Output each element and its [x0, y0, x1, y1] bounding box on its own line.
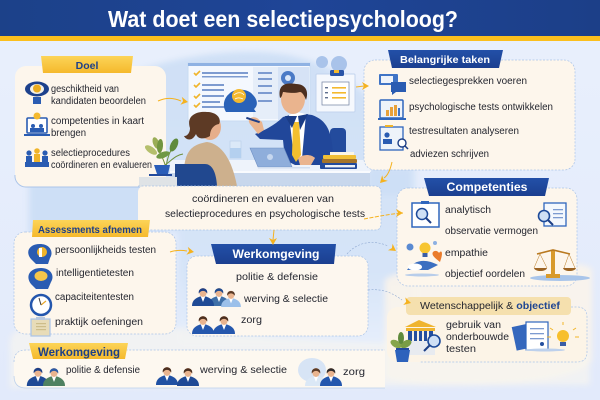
panel: Doel	[15, 56, 166, 187]
badge: Competenties	[424, 178, 549, 196]
text: werving & selectie: werving & selectie	[199, 365, 287, 376]
text: selectieprocedures	[51, 148, 152, 171]
people: recruiters	[156, 367, 199, 386]
icon: clipboard magnifier	[412, 201, 439, 227]
icon: team	[25, 148, 49, 167]
icon: clipboard	[31, 317, 50, 336]
central illustration: interview scene	[170, 56, 372, 186]
text: intelligentietesten: intelligentietesten	[56, 268, 134, 279]
text: analytisch: analytisch	[445, 205, 491, 216]
badge: Assessments afnemen	[32, 220, 150, 237]
text: geschiktheid: kandidaten beoordelen	[51, 96, 146, 107]
decorative gears	[281, 56, 347, 85]
clipboard	[316, 70, 355, 112]
text: competenties: competenties in kaart	[51, 116, 144, 127]
text: selectieprocedures: coördineren en evalueren	[51, 160, 152, 171]
icon: chat	[379, 74, 406, 95]
icon: scales	[530, 250, 590, 281]
text: zorg: zorg	[343, 367, 365, 378]
badge: Belangrijke taken: Belangrijke taken	[400, 54, 490, 66]
text: adviezen schrijven: adviezen schrijven	[410, 149, 489, 160]
candidate	[175, 112, 237, 186]
icon: clock	[31, 295, 51, 315]
text: gebruik: onderbouwde	[446, 332, 509, 343]
text: geschiktheid	[51, 84, 146, 107]
text: competenties: brengen	[51, 128, 86, 139]
panel: Wetenschappelijk & objectief	[387, 297, 587, 362]
text: objectief oordelen: objectief oordelen	[445, 269, 525, 280]
icon: light bulb	[547, 322, 579, 346]
text: geschiktheid: geschiktheid van	[51, 84, 119, 95]
badge: Competenties: Competenties	[446, 182, 528, 194]
text: gebruik: gebruik van	[446, 320, 501, 331]
people: doctor and colleague	[298, 358, 342, 386]
text: gebruik: testen	[446, 344, 476, 355]
icon: potted plant	[389, 332, 413, 362]
people: police and recruiter	[192, 288, 241, 307]
text: politie & defensie: politie & defensie	[66, 365, 140, 376]
text: persoonlijkheids testen: persoonlijkheids testen	[55, 245, 156, 256]
glass	[230, 141, 241, 158]
psychologist	[246, 84, 333, 165]
badge: Werkomgeving center	[211, 244, 336, 264]
people: police and defence	[27, 368, 65, 386]
text: testresultaten analyseren: testresultaten analyseren	[409, 126, 519, 137]
desk	[170, 160, 372, 186]
badge: Werkomgeving bottom: Werkomgeving	[38, 347, 120, 359]
icon: presentation	[24, 112, 50, 136]
badge: Assessments afnemen: Assessments afnemen	[38, 225, 142, 236]
badge: Werkomgeving bottom	[29, 343, 128, 359]
arrow: coordineren to Werkomgeving	[269, 230, 277, 245]
panel: Werkomgeving bottom	[14, 343, 385, 388]
icon: empathy bulb and heart	[405, 241, 442, 276]
icon: personality head	[28, 244, 52, 264]
panel: coordineren: coördineren en evalueren van	[192, 193, 334, 205]
panel: Competenties	[397, 178, 590, 286]
text: empathie: empathie	[445, 248, 488, 259]
books	[320, 152, 357, 169]
badge: Doel: Doel	[76, 60, 98, 72]
text: zorg: zorg	[241, 315, 262, 326]
text: gebruik	[446, 320, 509, 355]
plant on desk	[139, 136, 183, 187]
text: psychologische tests ontwikkelen: psychologische tests ontwikkelen	[409, 102, 553, 113]
panel: Belangrijke taken	[364, 50, 575, 170]
text: capaciteitentesten: capaciteitentesten	[55, 292, 134, 303]
arrow: Werkomgeving to Wetenschappelijk	[368, 290, 412, 307]
presentation board	[188, 63, 310, 121]
title: Wat doet een selectiepsycholoog?	[108, 6, 458, 32]
text: selectieprocedures: selectieprocedures	[51, 148, 130, 159]
arrow: Werkomgeving to Competenties	[347, 242, 398, 254]
arrow: Doel to scene	[158, 97, 189, 106]
title banner	[0, 0, 600, 41]
icon: chart laptop	[378, 100, 406, 120]
panel: Werkomgeving center	[187, 244, 368, 336]
badge: Wetenschappelijk: Wetenschappelijk & objectief	[420, 300, 560, 312]
icon: institution	[405, 320, 440, 355]
text: praktijk oefeningen: praktijk oefeningen	[55, 317, 143, 328]
arrow: taken to coordineren	[377, 162, 392, 186]
icon: intelligence head	[28, 268, 53, 289]
arrow: coordineren to Competenties	[364, 209, 403, 219]
text: selectiegesprekken voeren: selectiegesprekken voeren	[409, 76, 527, 87]
panel: Assessments afnemen	[14, 220, 176, 336]
text: competenties	[51, 116, 144, 139]
icon: documents	[512, 322, 565, 352]
text: observatie vermogen: observatie vermogen	[445, 226, 538, 237]
arrow: scene to taken	[356, 82, 369, 90]
chair of interviewer	[330, 128, 346, 158]
badge: Belangrijke taken	[388, 50, 503, 68]
text: politie & defensie: politie & defensie	[236, 272, 318, 283]
icon: report magnifier	[380, 125, 408, 150]
icon: eye	[25, 82, 49, 104]
panel: coordineren: selectieprocedures en psychologische tests	[165, 208, 365, 220]
people: care workers	[192, 316, 235, 334]
laptop	[250, 148, 310, 168]
arrow: Assessments to Werkomgeving	[170, 247, 195, 256]
badge: Doel	[41, 56, 133, 73]
icon: document magnifier	[538, 203, 566, 226]
badge: Wetenschappelijk	[406, 297, 571, 315]
panel: coordineren	[138, 186, 381, 230]
text: werving & selectie: werving & selectie	[243, 294, 328, 305]
badge: Werkomgeving center: Werkomgeving	[232, 247, 320, 261]
